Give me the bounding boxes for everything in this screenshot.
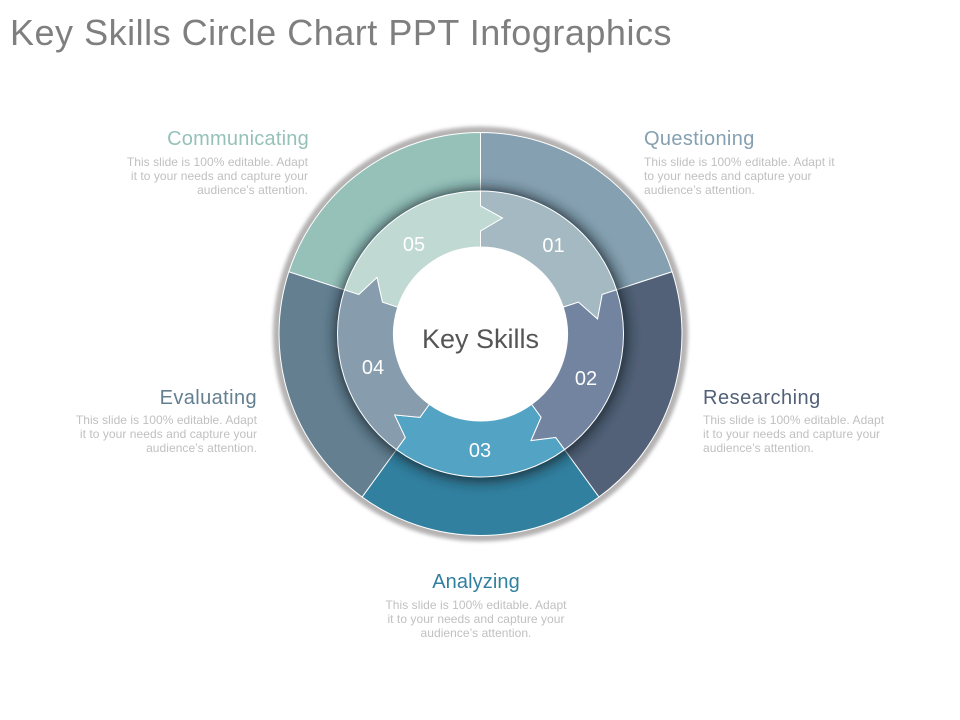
number 03: 03 bbox=[469, 440, 491, 462]
description: analyzing: audience’s attention. bbox=[421, 626, 531, 640]
description: questioning: This slide is 100% editable. Adapt it bbox=[644, 155, 835, 169]
text block: communicating bbox=[127, 128, 309, 197]
outer segment: analyzing bbox=[325, 334, 599, 610]
heading: communicating: Communicating bbox=[167, 128, 309, 150]
center white circle bbox=[394, 247, 568, 421]
number 01: 01 bbox=[542, 235, 565, 257]
description: communicating: it to your needs and capture your bbox=[131, 169, 308, 183]
description: evaluating: audience’s attention. bbox=[146, 441, 257, 455]
description: evaluating: it to your needs and capture your bbox=[80, 427, 257, 441]
inner segment 01 bbox=[480, 191, 616, 319]
inner segment 04 bbox=[286, 266, 472, 450]
text block: researching bbox=[703, 387, 885, 455]
description: researching: This slide is 100% editable. Adapt bbox=[703, 413, 885, 427]
center label: Key Skills bbox=[422, 324, 539, 354]
text block: analyzing bbox=[385, 571, 567, 640]
number 04: 04 bbox=[362, 357, 384, 379]
description: researching: it to your needs and capture your bbox=[703, 427, 880, 441]
number 05: 05 bbox=[403, 234, 425, 256]
description: communicating: This slide is 100% editable. Adapt bbox=[127, 155, 309, 169]
circle chart bbox=[271, 124, 690, 544]
inner segment 03 bbox=[379, 346, 565, 530]
outer segment: communicating bbox=[289, 89, 540, 334]
description: researching: audience’s attention. bbox=[703, 441, 814, 455]
description: questioning: audience’s attention. bbox=[644, 183, 755, 197]
text block: evaluating bbox=[76, 387, 258, 455]
description: analyzing: it to your needs and capture your bbox=[387, 612, 565, 626]
number 02: 02 bbox=[575, 368, 597, 390]
inner ring shadow bbox=[334, 188, 628, 482]
outer segment: evaluating bbox=[207, 221, 480, 497]
description: analyzing: This slide is 100% editable. Adapt bbox=[385, 598, 567, 612]
heading: evaluating: Evaluating bbox=[160, 387, 257, 409]
outer segment: questioning bbox=[480, 132, 672, 334]
outer halo ring bbox=[273, 126, 688, 542]
title: Key Skills Circle Chart PPT Infographics bbox=[10, 12, 672, 53]
outer segment: researching bbox=[480, 272, 731, 516]
text block: questioning bbox=[644, 128, 835, 197]
heading: analyzing: Analyzing bbox=[432, 571, 520, 593]
description: evaluating: This slide is 100% editable. Adapt bbox=[76, 413, 258, 427]
heading: researching: Researching bbox=[703, 387, 821, 409]
heading: questioning: Questioning bbox=[644, 128, 755, 150]
inner segment 05 bbox=[344, 160, 508, 329]
description: communicating: audience’s attention. bbox=[197, 183, 308, 197]
description: questioning: to your needs and capture your bbox=[644, 169, 812, 183]
inner segment 02 bbox=[495, 290, 659, 459]
